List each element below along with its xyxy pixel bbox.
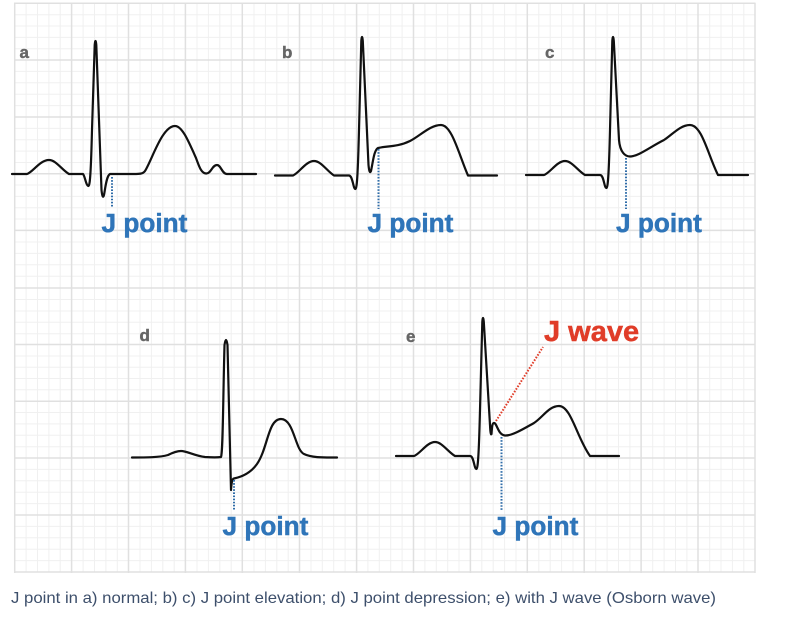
J point label e: J point	[492, 511, 579, 541]
label e: e	[406, 327, 415, 346]
ECG trace d	[132, 340, 337, 490]
ECG trace e	[396, 318, 619, 469]
J point label a: J point	[102, 208, 188, 238]
label a: a	[20, 43, 30, 62]
J point marker b	[378, 149, 380, 209]
J point marker a	[111, 177, 113, 208]
J point label d: J point	[222, 511, 309, 541]
panel: d depression	[132, 326, 337, 541]
J point label b: J point	[368, 208, 454, 238]
J point marker c	[625, 158, 627, 209]
label c: c	[545, 43, 554, 62]
J point marker d	[233, 480, 235, 510]
J point label c: J point	[616, 208, 702, 238]
J wave connector	[496, 347, 543, 421]
J point marker e	[500, 437, 502, 510]
ECG trace b	[275, 37, 497, 189]
ECG trace c	[526, 37, 748, 188]
panel: c elevation	[526, 37, 748, 238]
panel: a normal	[12, 41, 256, 238]
label b: b	[282, 43, 292, 62]
ECG trace a	[12, 41, 256, 197]
panel: b elevation	[275, 37, 497, 238]
J wave label: J wave	[544, 316, 639, 348]
panel: e J wave	[396, 316, 639, 541]
caption: J point in a) normal; b) c) J point elevation; d) J point depression; e) with J wave (Osborn wave)	[11, 590, 716, 607]
label d: d	[140, 326, 150, 345]
